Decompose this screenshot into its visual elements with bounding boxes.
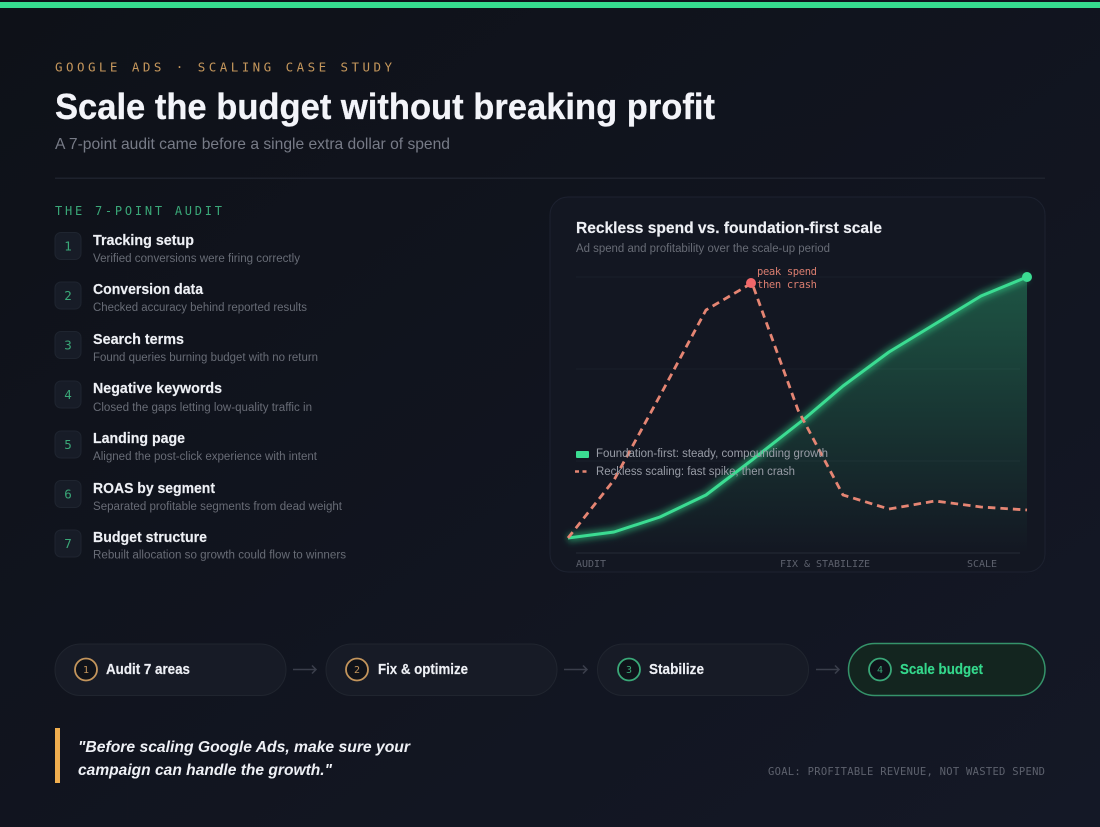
audit item 7 (55, 530, 346, 562)
legend: Foundation-first: steady, compounding growth (596, 448, 828, 460)
audit item 7: Rebuilt allocation so growth could flow to winners (93, 550, 346, 562)
legend: Reckless scaling: fast spike, then crash (596, 466, 795, 478)
step 2: 2 (354, 665, 360, 676)
x axis labels: FIX & STABILIZE (780, 559, 870, 570)
audit item 5: Aligned the post-click experience with intent (93, 451, 318, 463)
step 1: 1 (83, 665, 89, 676)
panel: chart (550, 197, 1045, 572)
step 3 (598, 644, 808, 696)
audit item 6 (55, 480, 343, 513)
step 2: Fix & optimize (378, 662, 468, 678)
audit item 5: Landing page (93, 431, 185, 447)
audit item 1: Tracking setup (93, 233, 194, 249)
audit item 5: 5 (64, 437, 72, 452)
peak marker (746, 278, 756, 288)
step 4: 4 (877, 665, 883, 676)
audit item 6: Separated profitable segments from dead weight (93, 501, 343, 513)
x axis labels: SCALE (967, 559, 997, 570)
quote: campaign can handle the growth." (78, 762, 332, 779)
step 3: Stabilize (649, 662, 704, 678)
panel: 7-point audit (55, 204, 346, 562)
audit item 1: 1 (64, 238, 72, 254)
audit item 7: Budget structure (93, 530, 207, 546)
audit item 7: 7 (64, 536, 72, 551)
audit item 3 (55, 332, 318, 364)
end marker (1022, 272, 1032, 282)
peak annotation: peak spend (757, 266, 817, 278)
audit item 4: Negative keywords (93, 381, 222, 397)
step 4: Scale budget (900, 662, 983, 678)
step 1: Audit 7 areas (106, 662, 190, 678)
peak annotation (757, 266, 817, 291)
audit item 1 (55, 232, 300, 265)
audit item 2: 2 (64, 288, 72, 303)
x axis labels (576, 559, 997, 570)
audit item 6: 6 (64, 486, 72, 502)
section heading: THE 7-POINT AUDIT (55, 204, 222, 218)
peak annotation: then crash (757, 279, 817, 291)
chart subtitle: Ad spend and profitability over the scale-up period (576, 243, 830, 255)
audit item 2 (55, 282, 307, 314)
eyebrow: GOOGLE ADS · SCALING CASE STUDY (55, 60, 392, 74)
step 1 (55, 644, 286, 696)
audit item 3: 3 (64, 338, 72, 352)
audit item 4 (55, 381, 312, 414)
audit item 3: Search terms (93, 332, 184, 348)
arrow (293, 666, 316, 674)
arrow (564, 666, 587, 674)
audit item 4: Closed the gaps letting low-quality traffic in (93, 402, 312, 414)
subtitle: A 7-point audit came before a single extra dollar of spend (55, 136, 450, 153)
audit item 1: Verified conversions were firing correctly (93, 253, 300, 265)
audit item 3: Found queries burning budget with no return (93, 352, 318, 364)
top accent bar (0, 2, 1100, 8)
step 4 (848, 644, 1045, 696)
process flow (55, 644, 1045, 696)
goal note: GOAL: PROFITABLE REVENUE, NOT WASTED SPEND (768, 766, 1045, 778)
quote: "Before scaling Google Ads, make sure your (78, 739, 411, 756)
arrow (816, 666, 839, 674)
legend (575, 448, 828, 478)
audit item 4: 4 (64, 387, 72, 402)
x axis labels: AUDIT (576, 559, 606, 570)
audit item 2: Conversion data (93, 282, 204, 298)
chart title: Reckless spend vs. foundation-first scale (576, 220, 882, 237)
audit item 2: Checked accuracy behind reported results (93, 302, 307, 314)
step 3: 3 (626, 665, 632, 676)
quote (55, 728, 411, 783)
line chart (568, 277, 1027, 553)
audit item 6: ROAS by segment (93, 481, 215, 497)
title: Scale the budget without breaking profit (55, 86, 715, 127)
audit item 5 (55, 431, 318, 463)
step 2 (326, 644, 557, 696)
